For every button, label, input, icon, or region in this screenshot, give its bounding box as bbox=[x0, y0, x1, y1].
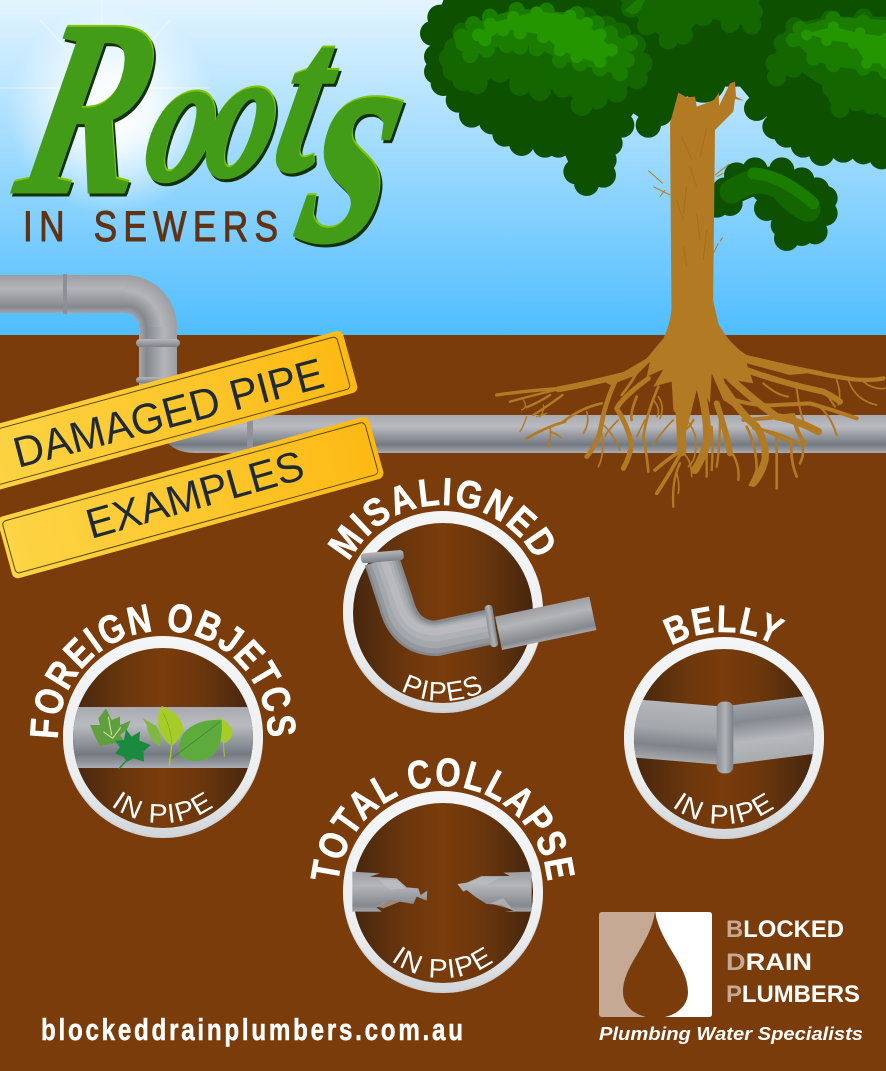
tree trunk bbox=[648, 82, 744, 337]
label: in pipe: IN PIPE bbox=[112, 792, 213, 823]
title: Roots: o bbox=[190, 12, 302, 217]
icon: water drop bbox=[599, 912, 712, 1017]
ground bbox=[0, 335, 886, 1071]
small side foliage bbox=[712, 167, 828, 240]
pipe: upper elbow and horizontal pipeline bbox=[0, 274, 886, 454]
icon: broken pipe bbox=[352, 872, 532, 912]
sign: examples: EXAMPLES bbox=[81, 441, 309, 548]
tree foliage bbox=[433, 0, 886, 240]
icon: leaves bbox=[90, 706, 233, 769]
sun glow behind title bbox=[0, 0, 217, 215]
heading: total collapse: TOTAL COLLAPSE bbox=[310, 758, 575, 880]
title: Roots: o bbox=[130, 16, 242, 221]
panel: belly in pipe bbox=[624, 605, 824, 839]
sign: damaged pipe: DAMAGED PIPE bbox=[8, 350, 329, 478]
company name bbox=[726, 916, 860, 1008]
logo bbox=[599, 912, 863, 1044]
heading: belly: BELLY bbox=[662, 605, 786, 645]
label: in pipe: IN PIPE bbox=[392, 946, 493, 978]
company name: PLUMBERS bbox=[726, 981, 860, 1008]
label: in pipe: IN PIPE bbox=[674, 792, 774, 824]
website url: blockeddrainplumbers.com.au bbox=[41, 1012, 463, 1047]
label: pipes: PIPES bbox=[402, 674, 482, 701]
sky background bbox=[0, 0, 886, 336]
icon: misaligned pipe bbox=[361, 550, 596, 650]
heading: foreign objetcs: FOREIGN OBJETCS bbox=[30, 604, 296, 738]
tagline: Plumbing Water Specialists bbox=[599, 1024, 863, 1044]
foliage highlights bbox=[448, 0, 886, 110]
panel: total collapse in pipe bbox=[310, 758, 575, 993]
heading: misaligned: MISALIGNED bbox=[327, 478, 554, 560]
subtitle: in sewers: IN SEWERS bbox=[23, 203, 278, 251]
tree roots bbox=[497, 300, 885, 507]
panel: foreign objects in pipe bbox=[30, 604, 296, 838]
company name: DRAIN bbox=[726, 949, 812, 976]
icon: sagging pipe bbox=[634, 696, 814, 774]
company name: BLOCKED bbox=[726, 916, 844, 943]
sign: examples bbox=[0, 416, 385, 580]
panel: misaligned pipes bbox=[327, 478, 596, 713]
title: Roots bbox=[0, 0, 438, 306]
